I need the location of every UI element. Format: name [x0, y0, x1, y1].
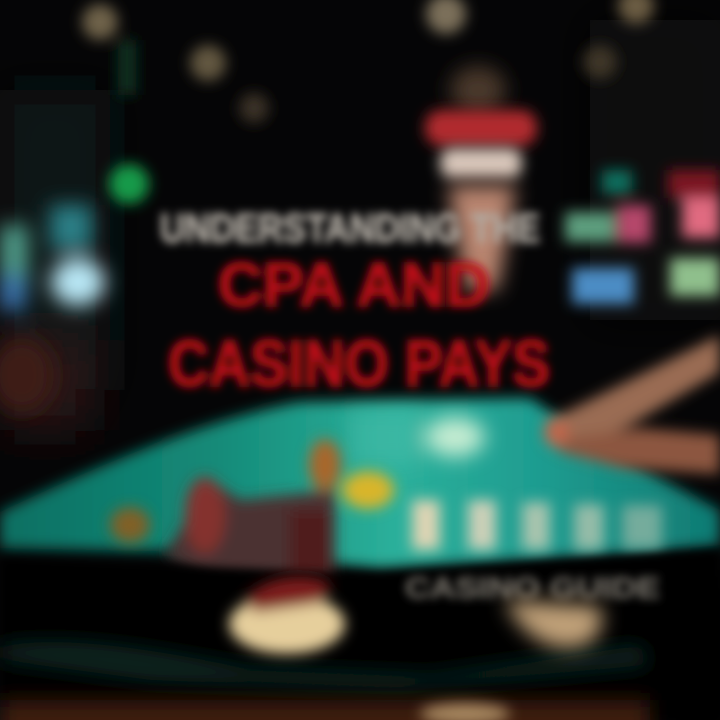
santa beard [448, 185, 516, 290]
title line 1: UNDERSTANDING THE [160, 205, 540, 251]
teal reflection [0, 642, 650, 690]
row of cards [412, 500, 662, 550]
orange chip [309, 439, 341, 491]
icon: green chip light [109, 164, 149, 204]
bokeh lights [82, 0, 654, 123]
title line 3: CASINO PAYS [168, 326, 550, 400]
santa boot right [505, 600, 602, 648]
table foreground edge [0, 550, 720, 720]
santa hat band [425, 110, 537, 146]
left screen lights [0, 205, 105, 413]
right black post [668, 575, 720, 720]
table highlights [350, 410, 485, 465]
santa figure [425, 66, 537, 290]
title line 2: CPA AND [218, 251, 490, 320]
santa face [440, 148, 522, 178]
casino table [0, 398, 720, 568]
background glow: upper scene [0, 20, 720, 430]
chips and cards [110, 439, 394, 590]
caption text: CASINO GUIDE [405, 572, 660, 605]
bottom glow [420, 703, 510, 720]
title block [160, 205, 550, 400]
right screen lights [565, 170, 720, 304]
chip stack [165, 480, 335, 590]
santa hat top [450, 66, 506, 114]
hand on the right [544, 335, 720, 474]
wooden edge [0, 700, 650, 720]
santa boot left [229, 577, 345, 654]
yellow chip [342, 471, 394, 509]
